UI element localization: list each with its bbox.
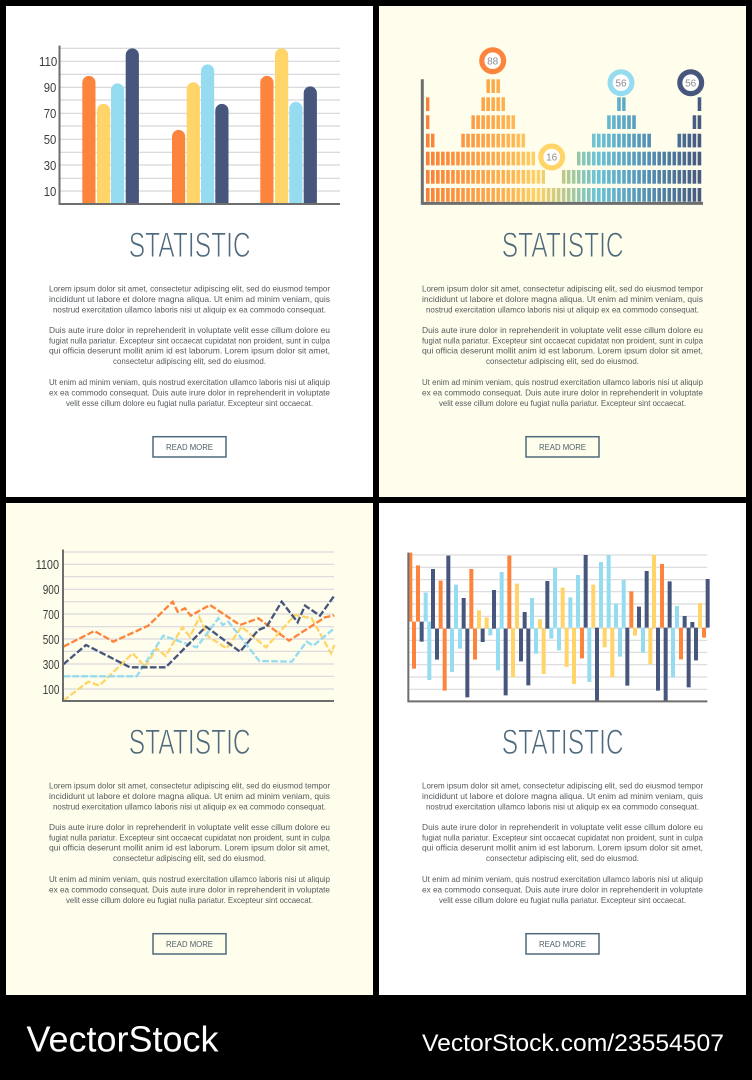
text block: ex ea commodo consequat. Duis aute irure dolor in reprehenderit in voluptate [49,884,330,894]
text block: velit esse cillum dolore eu fugiat nulla pariatur. Excepteur sint occaecat. [66,398,313,408]
text block: nostrud exercitation ullamco laboris nisi ut aliquip ex ea commodo consequat. [53,304,326,314]
text block: velit esse cillum dolore eu fugiat nulla pariatur. Excepteur sint occaecat. [66,895,313,905]
text block: nostrud exercitation ullamco laboris nisi ut aliquip ex ea commodo consequat. [53,802,326,812]
panel: stepped gradient histogram card [379,6,746,497]
text block: fugiat nulla pariatur. Excepteur sint occaecat cupidatat non proident, sunt in culpa [49,832,330,842]
striped gradient columns [426,79,702,202]
marker 16 [541,146,563,168]
heading: STATISTIC [129,225,251,265]
read more button [153,934,226,954]
text block: Duis aute irure dolor in reprehenderit in voluptate velit esse cillum dolore eu [422,325,703,335]
text block: Duis aute irure dolor in reprehenderit in voluptate velit esse cillum dolore eu [49,325,330,335]
text block: consectetur adipiscing elit, sed do eiusmod. [113,853,266,863]
text block: Ut enim ad minim veniam, quis nostrud exercitation ullamco laboris nisi ut aliquip [422,874,703,884]
line chart: 1100 [36,557,59,572]
watermark: image url: VectorStock.com/23554507 [422,1030,724,1057]
read more button: READ MORE [166,442,213,452]
heading: STATISTIC [502,225,624,265]
read more button: READ MORE [539,939,586,949]
marker 16: 16 [546,153,558,164]
watermark: logo: VectorStock [26,1019,219,1060]
read more button [526,437,599,457]
bar chart [39,46,340,204]
text block: incididunt ut labore et dolore magna aliqua. Ut enim ad minim veniam, quis [49,791,330,801]
line chart: 500 [43,632,59,647]
text block: qui officia deserunt mollit anim id est laborum. Lorem ipsum dolor sit amet, [49,843,330,853]
text block: qui officia deserunt mollit anim id est laborum. Lorem ipsum dolor sit amet, [49,346,330,356]
line chart: 300 [43,657,59,672]
text block: consectetur adipiscing elit, sed do eiusmod. [486,356,639,366]
card background [379,6,746,497]
text block: ex ea commodo consequat. Duis aute irure dolor in reprehenderit in voluptate [422,388,703,398]
text block: ex ea commodo consequat. Duis aute irure dolor in reprehenderit in voluptate [422,884,703,894]
histogram chart [422,50,703,203]
text block: qui officia deserunt mollit anim id est laborum. Lorem ipsum dolor sit amet, [422,843,703,853]
card background [379,503,746,995]
bar chart: 70 [44,106,56,121]
card background [6,6,373,497]
bar chart: 90 [44,80,56,95]
text block: Lorem ipsum dolor sit amet, consectetur adipiscing elit, sed do eiusmod tempor [422,284,703,294]
text block: Duis aute irure dolor in reprehenderit in voluptate velit esse cillum dolore eu [49,822,330,832]
panel: rounded bar chart card [6,6,373,497]
line chart: 700 [43,607,59,622]
text block: nostrud exercitation ullamco laboris nisi ut aliquip ex ea commodo consequat. [426,802,699,812]
bar chart: 30 [44,158,56,173]
marker 56 blue: 56 [615,78,627,89]
line chart [36,550,334,701]
heading: STATISTIC [502,722,624,762]
text block: fugiat nulla pariatur. Excepteur sint occaecat cupidatat non proident, sunt in culpa [422,335,703,345]
text block: Ut enim ad minim veniam, quis nostrud exercitation ullamco laboris nisi ut aliquip [422,377,703,387]
heading: STATISTIC [129,722,251,762]
text block [49,780,330,905]
text block: Ut enim ad minim veniam, quis nostrud exercitation ullamco laboris nisi ut aliquip [49,377,330,387]
marker 56 blue [610,72,632,94]
text block: Lorem ipsum dolor sit amet, consectetur adipiscing elit, sed do eiusmod tempor [422,780,703,790]
text block [49,284,330,408]
text block: velit esse cillum dolore eu fugiat nulla pariatur. Excepteur sint occaecat. [439,398,686,408]
bar chart: 50 [44,132,56,147]
text block: incididunt ut labore et dolore magna aliqua. Ut enim ad minim veniam, quis [49,294,330,304]
text block [422,780,703,905]
text block: incididunt ut labore et dolore magna aliqua. Ut enim ad minim veniam, quis [422,294,703,304]
panel: dashed line chart card [6,503,373,995]
line chart: 900 [43,582,59,597]
text block [422,284,703,408]
text block: consectetur adipiscing elit, sed do eiusmod. [113,356,266,366]
text block: qui officia deserunt mollit anim id est laborum. Lorem ipsum dolor sit amet, [422,346,703,356]
marker 88 [482,50,504,72]
bar chart: 10 [44,184,56,199]
text block: velit esse cillum dolore eu fugiat nulla pariatur. Excepteur sint occaecat. [439,895,686,905]
text block: fugiat nulla pariatur. Excepteur sint occaecat cupidatat non proident, sunt in culpa [422,832,703,842]
read more button [153,437,226,457]
line chart: 100 [43,682,59,697]
marker 88: 88 [487,56,499,67]
text block: fugiat nulla pariatur. Excepteur sint occaecat cupidatat non proident, sunt in culpa [49,335,330,345]
text block: Duis aute irure dolor in reprehenderit in voluptate velit esse cillum dolore eu [422,822,703,832]
data series [63,596,334,701]
card background [6,503,373,995]
read more button [526,934,599,954]
text block: ex ea commodo consequat. Duis aute irure dolor in reprehenderit in voluptate [49,388,330,398]
marker 56 navy [680,72,702,94]
text block: consectetur adipiscing elit, sed do eiusmod. [486,853,639,863]
text block: Lorem ipsum dolor sit amet, consectetur adipiscing elit, sed do eiusmod tempor [49,284,330,294]
read more button: READ MORE [539,442,586,452]
bar chart: 110 [39,54,57,69]
text block: incididunt ut labore et dolore magna aliqua. Ut enim ad minim veniam, quis [422,791,703,801]
diverging bar chart [408,553,708,701]
text block: Ut enim ad minim veniam, quis nostrud exercitation ullamco laboris nisi ut aliquip [49,874,330,884]
panel: diverging bars card [379,503,746,995]
marker 56 navy: 56 [685,78,697,89]
text block: Lorem ipsum dolor sit amet, consectetur adipiscing elit, sed do eiusmod tempor [49,780,330,790]
text block: nostrud exercitation ullamco laboris nisi ut aliquip ex ea commodo consequat. [426,304,699,314]
read more button: READ MORE [166,939,213,949]
